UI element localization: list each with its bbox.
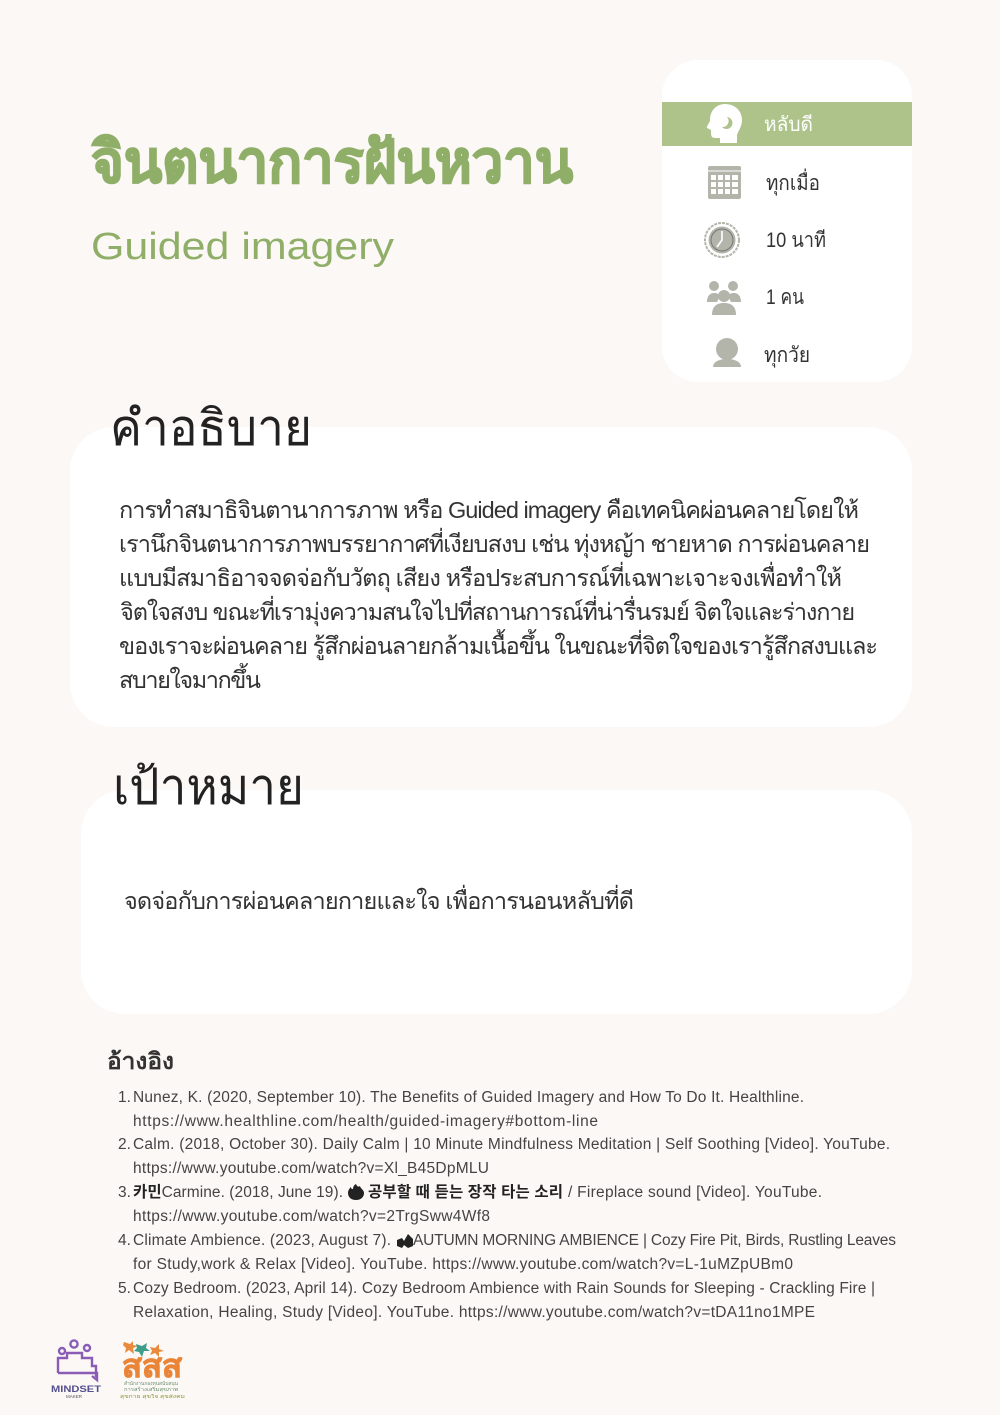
icon: clock bbox=[705, 223, 739, 257]
logo: ThaiHealth: สำนักงานกองทุนสนับสนุน bbox=[124, 1381, 179, 1387]
references list: 1. bbox=[118, 1089, 131, 1106]
icon: head with moon bbox=[707, 104, 742, 143]
logo: Mindset Maker: MAKER bbox=[66, 1394, 83, 1399]
icon: leaf emoji bbox=[397, 1234, 413, 1248]
panel: activity info bbox=[662, 60, 912, 382]
description text: การทำสมาธิจินตานาการภาพ หรือ Guided imagery คือเทคนิคผ่อนคลายโดยให้ bbox=[119, 497, 859, 523]
row: duration bbox=[705, 223, 826, 257]
row: participants: 1 คน bbox=[766, 286, 804, 309]
references list: 카민Carmine. (2018, June 19). bbox=[133, 1183, 343, 1201]
row: participants bbox=[707, 281, 804, 315]
references list: Nunez, K. (2020, September 10). The Benefits of Guided Imagery and How To Do It. Healthline. bbox=[133, 1089, 804, 1106]
row: frequency bbox=[708, 166, 820, 199]
heading: description: คำอธิบาย bbox=[110, 400, 312, 456]
goal text: จดจ่อกับการผ่อนคลายกายและใจ เพื่อการนอนหลับที่ดี bbox=[124, 884, 634, 914]
logo: Mindset Maker bbox=[51, 1340, 101, 1399]
references list: https://www.youtube.com/watch?v=2TrgSww4Wf8 bbox=[133, 1208, 490, 1225]
panel: goal bbox=[81, 759, 912, 1014]
row: frequency: ทุกเมื่อ bbox=[766, 168, 820, 196]
row: age bbox=[713, 338, 810, 368]
description text: ของเราจะผ่อนคลาย รู้สึกผ่อนลายกล้ามเนื้อขึ้น ในขณะที่จิตใจของเรารู้สึกสงบและ bbox=[119, 629, 878, 661]
description text: สบายใจมากขึ้น bbox=[119, 663, 261, 693]
references list: Climate Ambience. (2023, August 7). bbox=[133, 1232, 391, 1249]
references list: for Study,work & Relax [Video]. YouTube. https://www.youtube.com/watch?v=L-1uMZpUBm0 bbox=[133, 1256, 793, 1273]
logo: Mindset Maker: MINDSET bbox=[51, 1384, 101, 1395]
description text: จิตใจสงบ ขณะที่เรามุ่งความสนใจไปที่สถานการณ์ที่น่ารื่นรมย์ จิตใจและร่างกาย bbox=[120, 595, 855, 626]
category band: หลับดี bbox=[764, 114, 813, 136]
references list: https://www.healthline.com/health/guided-imagery#bottom-line bbox=[133, 1113, 598, 1130]
logo: ThaiHealth: สสส bbox=[122, 1348, 182, 1384]
category band bbox=[662, 102, 912, 146]
references list: / Fireplace sound [Video]. YouTube. bbox=[568, 1184, 822, 1201]
icon: fire emoji bbox=[348, 1184, 364, 1200]
references list: AUTUMN MORNING AMBIENCE | Cozy Fire Pit, Birds, Rustling Leaves bbox=[413, 1232, 896, 1249]
references list: 2. bbox=[118, 1136, 131, 1153]
icon: calendar bbox=[708, 166, 741, 199]
logo: ThaiHealth: สุขกาย สุขใจ สุขสังคม bbox=[120, 1394, 185, 1400]
title: จินตนาการฝันหวาน bbox=[91, 130, 573, 195]
references list: https://www.youtube.com/watch?v=Xl_B45DpMLU bbox=[133, 1160, 489, 1177]
references list bbox=[118, 1089, 896, 1321]
logo: ThaiHealth bbox=[120, 1341, 185, 1400]
icon: person bbox=[713, 338, 741, 367]
description text bbox=[119, 497, 878, 693]
references list: 5. bbox=[118, 1280, 131, 1297]
heading: goal: เป้าหมาย bbox=[113, 759, 304, 815]
subtitle: Guided imagery bbox=[91, 226, 394, 268]
references heading: อ้างอิง bbox=[107, 1048, 174, 1074]
references list: Calm. (2018, October 30). Daily Calm | 10 Minute Mindfulness Meditation | Self Soothing [Video]. YouTube. bbox=[133, 1136, 890, 1153]
logo: ThaiHealth: การสร้างเสริมสุขภาพ bbox=[124, 1386, 178, 1393]
row: duration: 10 นาที bbox=[766, 229, 826, 252]
references list: 공부할 때 듣는 장작 타는 소리 bbox=[368, 1183, 563, 1201]
references list: 4. bbox=[118, 1232, 131, 1249]
panel: description bbox=[70, 400, 912, 727]
row: age: ทุกวัย bbox=[764, 344, 810, 368]
description text: แบบมีสมาธิอาจจดจ่อกับวัตถุ เสียง หรือประสบการณ์ที่เฉพาะเจาะจงเพื่อทำให้ bbox=[119, 561, 842, 592]
references list: 3. bbox=[118, 1184, 131, 1201]
description text: เรานึกจินตนาการภาพบรรยากาศที่เงียบสงบ เช่น ทุ่งหญ้า ชายหาด การผ่อนคลาย bbox=[119, 527, 870, 558]
references list: Cozy Bedroom. (2023, April 14). Cozy Bedroom Ambience with Rain Sounds for Sleeping - Crackling Fire | bbox=[133, 1280, 875, 1297]
icon: group of people bbox=[707, 281, 741, 315]
references list: Relaxation, Healing, Study [Video]. YouTube. https://www.youtube.com/watch?v=tDA11no1MPE bbox=[133, 1304, 815, 1321]
